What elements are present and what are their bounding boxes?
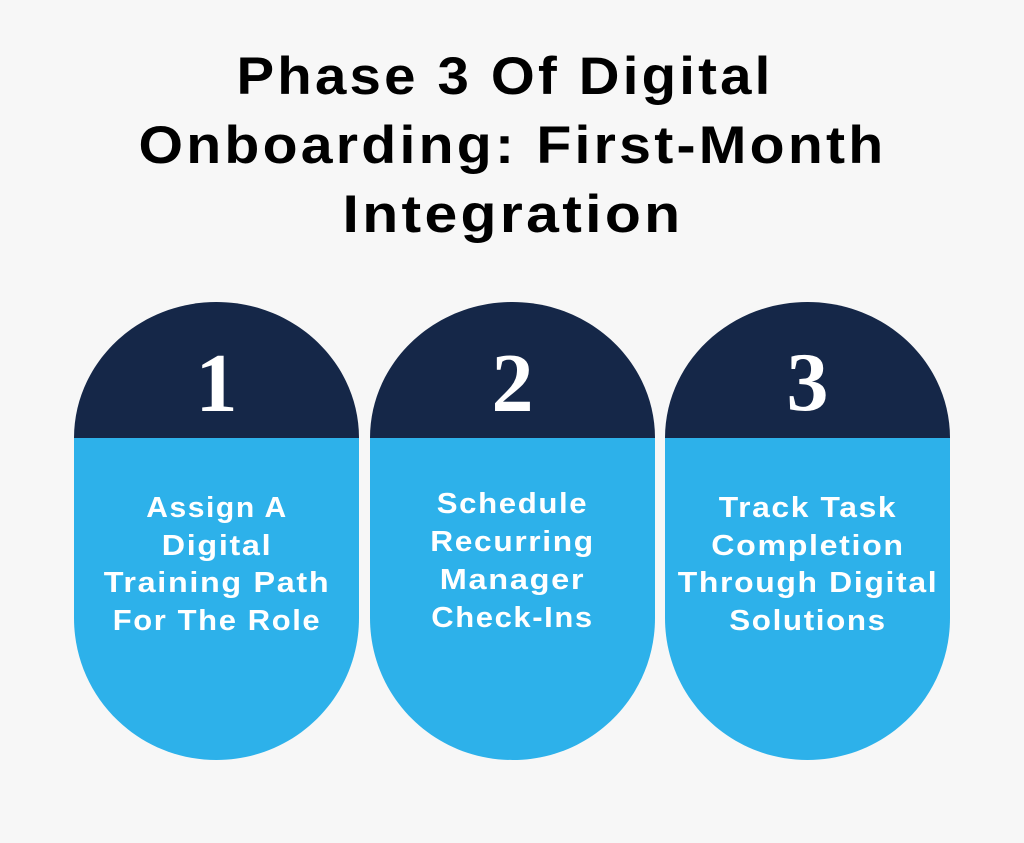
title: Onboarding: First-Month [138, 116, 886, 175]
step 3 text: Completion [711, 530, 905, 562]
step 2 text: Schedule [437, 488, 588, 520]
step 3 header [665, 302, 950, 438]
step 2 text: Check-Ins [431, 602, 594, 634]
step 2 lower body [370, 438, 655, 760]
step 2 number: 2 [492, 337, 534, 430]
step 3 text: Solutions [729, 605, 887, 637]
panel: step 3 [665, 302, 950, 760]
step 1 lower body [74, 438, 359, 760]
title: Integration [342, 185, 684, 244]
step 1 text: Digital [162, 530, 272, 562]
step 3 text [678, 492, 938, 637]
panel: step 2 [370, 302, 655, 760]
panel: step 1 [74, 302, 359, 760]
title [138, 47, 886, 244]
step 3 number: 3 [786, 336, 828, 429]
step 1 text: For The Role [113, 605, 321, 637]
step 1 text: Assign A [146, 492, 288, 524]
step 3 text: Through Digital [678, 567, 938, 599]
title: Phase 3 Of Digital [236, 47, 774, 106]
step 2 text [430, 488, 595, 634]
step 3 text: Track Task [719, 492, 897, 524]
step 2 text: Manager [440, 564, 585, 596]
step 2 header [370, 302, 655, 438]
step 1 text: Training Path [104, 567, 330, 599]
step 1 text [104, 492, 330, 637]
step 1 number: 1 [196, 337, 238, 430]
step 2 text: Recurring [430, 526, 595, 558]
step 1 header [74, 302, 359, 438]
step 3 lower body [665, 438, 950, 760]
